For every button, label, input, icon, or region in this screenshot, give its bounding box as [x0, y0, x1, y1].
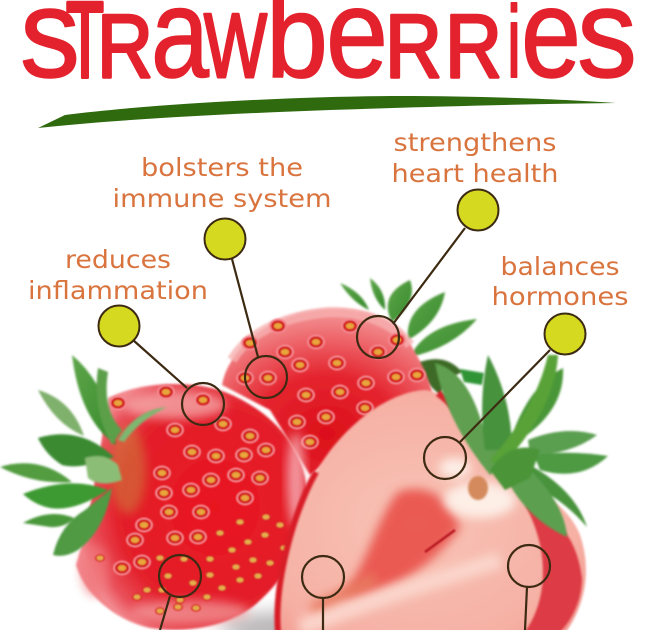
- label: reduces inflammation: inflammation: [28, 276, 208, 305]
- back strawberry leaves: [340, 278, 484, 395]
- label: strengthens heart health: heart health: [392, 159, 558, 188]
- calyx shading: [110, 426, 146, 514]
- cut strawberry: [277, 390, 586, 630]
- label: balances hormones: balances: [500, 252, 620, 281]
- white centre: [444, 482, 516, 518]
- label: bolsters the immune system: [112, 153, 332, 213]
- yellow callout dots: [98, 190, 586, 354]
- cut strawberry leaves: [435, 355, 608, 537]
- seeds: [95, 384, 289, 615]
- back strawberry: [222, 309, 432, 475]
- ground shadow: [220, 612, 360, 630]
- title: [20, 0, 637, 104]
- label: bolsters the immune system: immune system: [112, 184, 332, 213]
- red core: [340, 489, 460, 600]
- label: strengthens heart health: [392, 128, 558, 188]
- strawberry photo: [0, 278, 608, 630]
- label: reduces inflammation: reduces: [65, 245, 171, 274]
- left strawberry leaves: [0, 355, 167, 556]
- label: balances hormones: [492, 252, 628, 311]
- left strawberry: [76, 384, 307, 630]
- red skin edges: [277, 472, 316, 630]
- callout connectors: [133, 228, 550, 630]
- label: balances hormones: hormones: [492, 282, 628, 311]
- green swoosh: [38, 96, 616, 128]
- label: strengthens heart health: strengthens: [394, 128, 556, 157]
- label: reduces inflammation: [28, 245, 208, 305]
- label: bolsters the immune system: bolsters the: [141, 153, 303, 182]
